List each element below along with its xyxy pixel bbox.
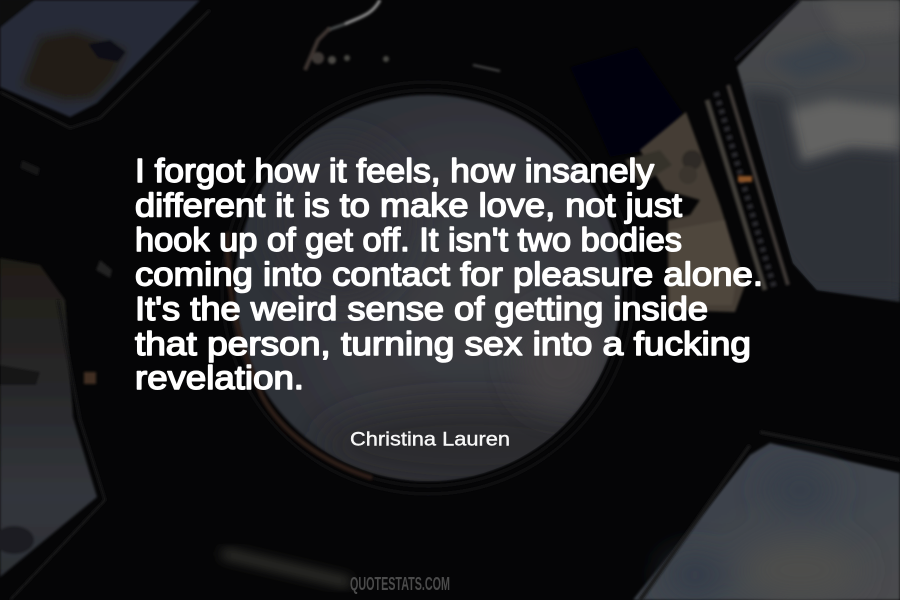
quote line 1: I forgot how it feels, how insanely [135, 152, 655, 189]
quote line 3: hook up of get off. It isn't two bodies [135, 221, 682, 258]
quote line 2: different it is to make love, not just [135, 186, 682, 224]
author name: Christina Lauren [350, 430, 510, 450]
window: top right [737, 0, 900, 302]
window: bottom right [633, 443, 900, 600]
quote line 6: that person, turning sex into a fucking [135, 325, 751, 362]
quote line 4: coming into contact for pleasure alone. [135, 256, 763, 292]
central porthole [235, 95, 621, 487]
beige equipment [625, 112, 745, 312]
window: bottom left [0, 258, 97, 577]
dark object over porthole [570, 47, 683, 157]
hardware near pipe [20, 28, 500, 384]
window: top left [0, 0, 200, 117]
porthole frame rings [222, 82, 634, 494]
quote line 5: It's the weird sense of getting inside [135, 290, 708, 327]
quote line 7: revelation. [135, 359, 304, 396]
window rail [707, 0, 800, 290]
